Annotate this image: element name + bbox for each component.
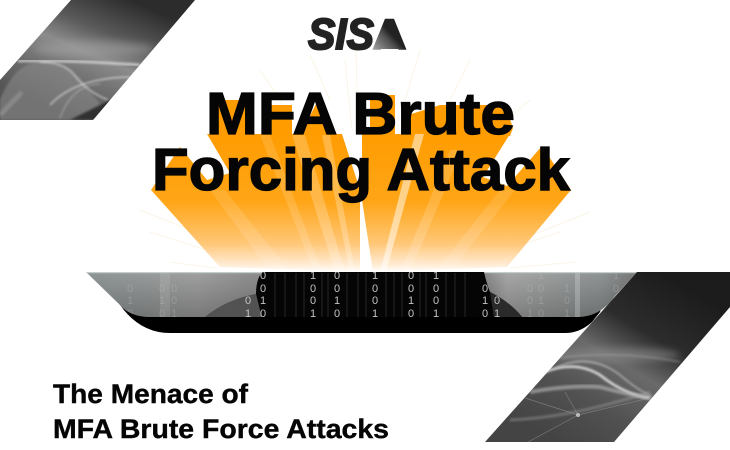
bright binary digits — [245, 272, 500, 317]
hooded figure silhouette — [204, 272, 523, 318]
bright binary digits: 0 — [372, 295, 378, 307]
dim binary digits: 1 — [127, 295, 133, 307]
dim binary digits — [128, 273, 618, 317]
bright binary digits: 0 — [408, 283, 414, 295]
bright binary digits: 1 — [260, 295, 266, 307]
bright binary digits: 0 — [245, 295, 251, 307]
bright binary digits: 1 — [310, 270, 316, 282]
bright binary digits: 0 — [310, 283, 316, 295]
dim binary digits: 0 — [159, 283, 165, 295]
screen with hooded figure and binary code — [86, 270, 637, 320]
bright binary digits: 0 — [408, 308, 414, 320]
bright binary digits: 0 — [260, 270, 266, 282]
dim binary digits: 0 — [527, 283, 533, 295]
bottom-right abstract wave panel — [480, 272, 730, 442]
bright binary digits: 1 — [433, 270, 439, 282]
bright binary digits: 1 — [433, 308, 439, 320]
bright binary digits: 1 — [372, 270, 378, 282]
heading: The Menace of MFA Brute Force Attacks: The Menace of — [53, 379, 248, 409]
bright binary digits: 1 — [494, 308, 500, 320]
dim binary digits: 1 — [171, 308, 177, 320]
SISA logo: SIS — [308, 10, 374, 59]
dim binary digits: 0 — [538, 308, 544, 320]
laptop screen lip — [120, 305, 602, 333]
bright binary digits: 1 — [372, 308, 378, 320]
dim binary digits: 1 — [613, 270, 619, 282]
bright binary digits: 0 — [494, 295, 500, 307]
bright binary digits: 1 — [310, 308, 316, 320]
heading: The Menace of MFA Brute Force Attacks — [53, 379, 389, 444]
dim binary digits: 1 — [564, 283, 570, 295]
bright binary digits: 0 — [310, 295, 316, 307]
dim binary digits: 0 — [159, 308, 165, 320]
dim binary digits: 0 — [527, 295, 533, 307]
dim binary digits: 1 — [564, 308, 570, 320]
dim binary digits: 0 — [538, 283, 544, 295]
SISA logo: A — [372, 10, 407, 59]
bright binary digits: 0 — [408, 270, 414, 282]
heading: The Menace of MFA Brute Force Attacks: MFA Brute Force Attacks — [53, 414, 389, 444]
title — [152, 81, 570, 203]
bright binary digits: 0 — [334, 283, 340, 295]
dim binary digits: 1 — [527, 308, 533, 320]
faint background rays — [140, 50, 590, 268]
dim binary digits: 0 — [171, 295, 177, 307]
bright binary digits: 0 — [482, 283, 488, 295]
dim binary digits: 1 — [159, 295, 165, 307]
title: MFA Brute — [206, 81, 515, 147]
dim binary digits: 0 — [171, 283, 177, 295]
bright binary digits: 0 — [334, 270, 340, 282]
dim binary digits: 0 — [127, 283, 133, 295]
bright binary digits: 1 — [482, 295, 488, 307]
dim binary digits: 0 — [613, 283, 619, 295]
bright binary digits: 0 — [260, 308, 266, 320]
bright binary digits: 0 — [482, 308, 488, 320]
title: Forcing Attack — [152, 137, 570, 203]
dim binary digits: 1 — [538, 270, 544, 282]
bright binary digits: 1 — [245, 308, 251, 320]
dim binary digits: 0 — [127, 308, 133, 320]
dim binary digits: 0 — [564, 295, 570, 307]
bright binary digits: 0 — [260, 283, 266, 295]
top-left abstract wave panel — [0, 0, 200, 120]
bright binary digits: 0 — [433, 283, 439, 295]
bright binary digits: 0 — [334, 308, 340, 320]
dim binary digits: 1 — [538, 295, 544, 307]
bright binary digits: 0 — [372, 283, 378, 295]
orange light rays behind the title — [151, 95, 571, 272]
bright binary digits: 1 — [334, 295, 340, 307]
bright binary digits: 1 — [408, 295, 414, 307]
bright binary digits: 0 — [433, 295, 439, 307]
